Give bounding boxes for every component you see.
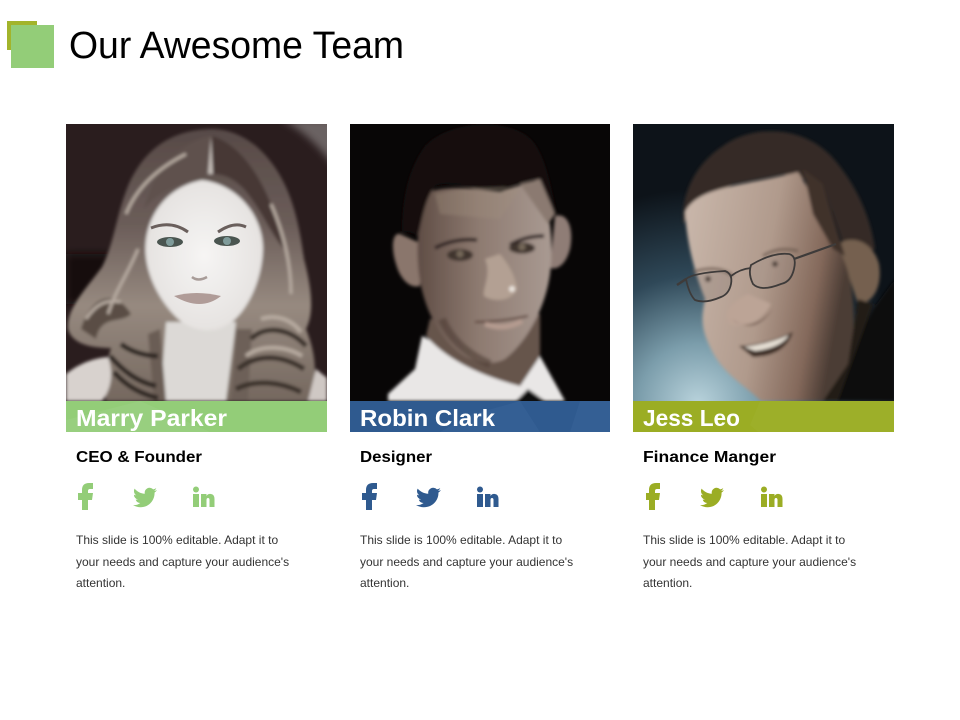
panel: Marry Parker — [66, 119, 336, 590]
role: Finance Manger — [643, 449, 776, 466]
glasses — [677, 244, 836, 301]
description: your needs and capture your audience's — [643, 555, 856, 569]
name banner: Robin Clark — [350, 401, 610, 432]
description: your needs and capture your audience's — [360, 555, 573, 569]
description: This slide is 100% editable. Adapt it to — [360, 533, 562, 547]
name banner: Marry Parker — [66, 401, 327, 432]
portrait: Marry Parker — [66, 119, 336, 401]
description: your needs and capture your audience's — [76, 555, 289, 569]
name banner: Robin Clark: Robin Clark — [360, 405, 495, 431]
social icons — [646, 483, 782, 510]
description: This slide is 100% editable. Adapt it to — [76, 533, 278, 547]
description: attention. — [643, 576, 692, 590]
social icons — [362, 483, 498, 510]
portrait: Jess Leo — [633, 124, 895, 401]
panel: Robin Clark — [350, 124, 610, 590]
title: Our Awesome Team — [69, 25, 404, 67]
role: Designer — [360, 449, 432, 466]
title icon: overlapping squares — [7, 21, 54, 68]
role: CEO & Founder — [76, 449, 202, 466]
panel: Jess Leo — [633, 124, 895, 590]
name banner: Jess Leo: Jess Leo — [643, 405, 740, 431]
description: This slide is 100% editable. Adapt it to — [643, 533, 845, 547]
description: attention. — [76, 576, 125, 590]
description — [360, 533, 573, 590]
name banner: Jess Leo — [633, 401, 894, 432]
name banner: Marry Parker: Marry Parker — [76, 405, 227, 431]
portrait: Robin Clark — [350, 124, 610, 401]
description — [643, 533, 856, 590]
description — [76, 533, 289, 590]
description: attention. — [360, 576, 409, 590]
social icons — [78, 483, 214, 510]
